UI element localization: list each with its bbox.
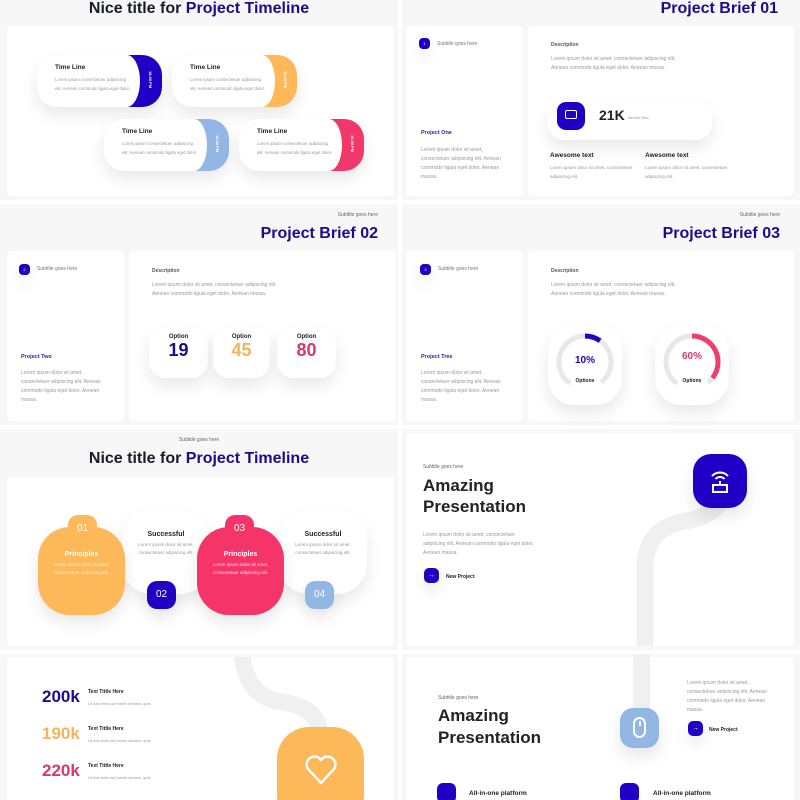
card: time line 3: Time Line bbox=[122, 128, 152, 135]
white card 4: Lorem ipsum dolor sit amet, bbox=[295, 542, 351, 547]
panel: left: consectetuer adipiscing elit. Aenean bbox=[21, 379, 101, 385]
card: time line 2: 18.00 PM bbox=[283, 71, 288, 88]
stat 220k: 220k bbox=[42, 761, 80, 780]
slide 5: timeline blobs: Subtitle goes here bbox=[179, 437, 219, 443]
stat pill 21K: 21K bbox=[599, 107, 625, 123]
card: time line 3: elit. Aenean commodo ligula eget dolor. bbox=[122, 150, 197, 155]
panel: right: Aenean commodo ligula eget dolor. Aenean massa. bbox=[551, 65, 665, 71]
card: time line 4: Time Line bbox=[257, 128, 287, 135]
card: time line 3 bbox=[104, 119, 229, 171]
badge 01 bbox=[68, 515, 97, 542]
heading bbox=[423, 476, 526, 516]
stat pill 21K bbox=[548, 100, 712, 140]
card: time line 2 bbox=[172, 55, 297, 107]
card: time line 1: elit. Aenean commodo ligula eget dolor. bbox=[55, 86, 130, 91]
panel: Text Tittle Here bbox=[88, 763, 124, 769]
panel: left: massa. bbox=[421, 174, 437, 180]
badge 03 bbox=[225, 515, 254, 542]
ring card 60%: Options bbox=[683, 378, 701, 384]
heading: Amazing bbox=[438, 706, 509, 725]
card: time line 4: elit. Aenean commodo ligula eget dolor. bbox=[257, 150, 332, 155]
badge 1 bbox=[419, 38, 430, 49]
panel: commodo ligula eget dolor. Aenean bbox=[687, 698, 765, 704]
ring card 60%: 60% bbox=[682, 351, 702, 362]
panel: options bbox=[129, 251, 396, 421]
panel: left bbox=[7, 251, 124, 421]
icon: chat bbox=[557, 102, 585, 130]
heading bbox=[438, 706, 541, 747]
card: time line 1: Lorem ipsum consectetuer adipiscing bbox=[55, 77, 126, 82]
panel: New Project bbox=[709, 727, 738, 733]
panel: left: consectetuer adipiscing elit. Aenean bbox=[421, 156, 501, 162]
pink card 3 bbox=[197, 527, 284, 615]
slide 2: project brief 01 bbox=[402, 0, 800, 200]
slide 5: timeline blobs bbox=[0, 429, 398, 650]
option 45: 45 bbox=[231, 340, 252, 360]
panel: Ut wisi enim ad minim veniam, quis bbox=[88, 775, 150, 780]
title: Nice title for Project Timeline bbox=[89, 0, 309, 17]
button new project: → bbox=[692, 725, 699, 732]
panel: left: Lorem ipsum dolor sit amet, bbox=[421, 370, 483, 376]
card: time line 3: 10.00 PM bbox=[215, 135, 220, 152]
option 19: Option bbox=[169, 334, 188, 340]
panel: rings: Lorem ipsum dolor sit amet, consectetuer adipiscing elit. bbox=[551, 282, 676, 288]
card: time line 4: Lorem ipsum consectetuer adipiscing bbox=[257, 141, 328, 146]
path bbox=[636, 506, 727, 646]
card: time line 2: Time Line bbox=[190, 64, 220, 71]
pink card 3: consectetuer adipiscing elit. bbox=[213, 570, 268, 575]
panel: left: massa. bbox=[421, 397, 437, 403]
panel: right: Lorem ipsum dolor sit amet, consectetuer adipiscing elit. bbox=[551, 56, 676, 62]
heading: Amazing bbox=[423, 476, 494, 495]
title: Project Brief 02 bbox=[261, 225, 378, 242]
panel: left: massa. bbox=[21, 397, 37, 403]
slide 3: project brief 02: Subtitle goes here bbox=[338, 212, 378, 218]
title: Project Brief 03 bbox=[663, 225, 780, 242]
panel: timeline bbox=[7, 26, 394, 196]
title: Nice title for Project Timeline bbox=[89, 450, 309, 467]
icon: router bbox=[693, 454, 747, 508]
orange card 1: consectetuer adipiscing elit. bbox=[54, 570, 109, 575]
option 80 bbox=[277, 327, 336, 378]
panel: right: Description bbox=[551, 42, 579, 48]
heading: Presentation bbox=[438, 728, 541, 747]
orange card 1: Lorem ipsum dolor sit amet, bbox=[54, 562, 109, 567]
title: Project Brief 01 bbox=[661, 0, 778, 17]
panel: left: Lorem ipsum dolor sit amet, bbox=[21, 370, 83, 376]
panel: left: Project Two bbox=[21, 354, 52, 360]
card: time line 2: elit. Aenean commodo ligula eget dolor. bbox=[190, 86, 265, 91]
panel: left bbox=[406, 251, 523, 421]
panel bbox=[406, 657, 794, 800]
badge 1: 1 bbox=[423, 41, 426, 46]
slide 8: amazing presentation 2 bbox=[402, 654, 800, 800]
white card 2: Successful bbox=[148, 531, 184, 538]
panel: right: Awesome text bbox=[645, 152, 689, 159]
white card 2: consectetuer adipiscing elit. bbox=[138, 550, 194, 555]
panel: Lorem ipsum dolor sit amet, bbox=[687, 680, 749, 686]
feature 2 bbox=[620, 783, 639, 800]
card: time line 1: Time Line bbox=[55, 64, 85, 71]
slide 7: stats and heart bbox=[0, 654, 398, 800]
card: time line 4: 10.00 PM bbox=[350, 135, 355, 152]
option 19: 19 bbox=[168, 340, 189, 360]
card: time line 1: 18.00 PM bbox=[148, 71, 153, 88]
panel bbox=[7, 657, 394, 800]
pink card 3: Principles bbox=[224, 551, 257, 558]
panel: right: adipiscing elit. bbox=[550, 174, 578, 179]
panel: left: Subtitle goes here bbox=[37, 266, 77, 272]
panel: left: Lorem ipsum dolor sit amet, bbox=[421, 147, 483, 153]
feature 1 bbox=[437, 783, 456, 800]
card: time line 3: Lorem ipsum consectetuer adipiscing bbox=[122, 141, 193, 146]
panel: Text Tittle Here bbox=[88, 726, 124, 732]
badge 02: 02 bbox=[156, 589, 167, 600]
panel: Ut wisi enim ad minim veniam, quis bbox=[88, 738, 150, 743]
stat pill 21K: Member New bbox=[628, 116, 649, 120]
panel: Text Tittle Here bbox=[88, 689, 124, 695]
panel bbox=[406, 433, 794, 646]
slide 6: amazing presentation bbox=[402, 429, 800, 650]
panel: right bbox=[528, 26, 794, 196]
button new project bbox=[424, 568, 439, 583]
white card 2 bbox=[122, 510, 210, 594]
panel: Lorem ipsum dolor sit amet, consectetuer bbox=[423, 532, 515, 538]
card: time line 2: Lorem ipsum consectetuer adipiscing bbox=[190, 77, 261, 82]
orange card 1: Principles bbox=[65, 551, 98, 558]
button new project: → bbox=[428, 572, 435, 579]
panel: adipiscing elit. Aenean commodo ligula eget dolor. bbox=[423, 541, 534, 547]
slide 4: project brief 03: Subtitle goes here bbox=[740, 212, 780, 218]
icon: heart blob bbox=[277, 727, 364, 800]
panel: All-in-one platform bbox=[653, 790, 711, 797]
pink card 3: Lorem ipsum dolor sit amet, bbox=[213, 562, 268, 567]
ring card 10%: 10% bbox=[575, 355, 595, 366]
icon: mouse bbox=[620, 708, 659, 748]
panel: right: Lorem ipsum dolor sit amet, consectetuer bbox=[645, 165, 728, 170]
panel: All-in-one platform bbox=[469, 790, 527, 797]
stat 200k: 200k bbox=[42, 687, 80, 706]
badge 04 bbox=[305, 581, 334, 609]
panel: consectetuer adipiscing elit. Aenean bbox=[687, 689, 767, 695]
panel: Aenean massa. bbox=[423, 550, 458, 556]
white card 2: Lorem ipsum dolor sit amet, bbox=[138, 542, 194, 547]
panel: left: Subtitle goes here bbox=[437, 41, 477, 47]
panel: rings: Aenean commodo ligula eget dolor. Aenean massa. bbox=[551, 291, 665, 297]
path bbox=[234, 657, 328, 727]
option 19 bbox=[149, 327, 208, 378]
option 80: Option bbox=[297, 334, 316, 340]
panel: left: consectetuer adipiscing elit. Aenean bbox=[421, 379, 501, 385]
stat 190k: 190k bbox=[42, 724, 80, 743]
option 45 bbox=[213, 327, 270, 378]
badge 01: 01 bbox=[77, 523, 88, 534]
panel: left: Project One bbox=[421, 130, 452, 136]
panel: options: Description bbox=[152, 268, 180, 274]
card: time line 4 bbox=[239, 119, 364, 171]
panel: left: Project Tree bbox=[421, 354, 452, 360]
panel: New Project bbox=[446, 574, 475, 580]
panel: Subtitle goes here bbox=[423, 464, 463, 470]
panel: left: commodo ligula eget dolor. Aenean bbox=[421, 165, 499, 171]
panel: massa. bbox=[687, 707, 703, 713]
option 80: 80 bbox=[296, 340, 317, 360]
panel: options: Aenean commodo ligula eget dolor. Aenean massa. bbox=[152, 291, 266, 297]
panel: left bbox=[406, 26, 523, 196]
orange card 1 bbox=[38, 527, 125, 615]
panel: Subtitle goes here bbox=[438, 695, 478, 701]
panel bbox=[7, 477, 394, 646]
panel: left: commodo ligula eget dolor. Aenean bbox=[421, 388, 499, 394]
ring card 10%: Options bbox=[576, 378, 594, 384]
panel: rings: Description bbox=[551, 268, 579, 274]
path bbox=[633, 652, 650, 722]
badge 03: 03 bbox=[234, 523, 245, 534]
panel: left: commodo ligula eget dolor. Aenean bbox=[21, 388, 99, 394]
white card 4 bbox=[279, 510, 367, 594]
heading: Presentation bbox=[423, 497, 526, 516]
slide 4: project brief 03 bbox=[402, 204, 800, 425]
panel: options: Lorem ipsum dolor sit amet, consectetuer adipiscing elit. bbox=[152, 282, 277, 288]
panel: Ut wisi enim ad minim veniam, quis bbox=[88, 701, 150, 706]
panel: left: 2 bbox=[23, 267, 26, 272]
slide 3: project brief 02 bbox=[0, 204, 398, 425]
badge 04: 04 bbox=[314, 589, 325, 600]
panel: rings bbox=[528, 251, 794, 421]
white card 4: consectetuer adipiscing elit. bbox=[295, 550, 351, 555]
panel: right: Lorem ipsum dolor sit amet, consectetuer bbox=[550, 165, 633, 170]
panel: right: Awesome text bbox=[550, 152, 594, 159]
button new project bbox=[688, 721, 703, 736]
panel: right: adipiscing elit. bbox=[645, 174, 673, 179]
badge 02 bbox=[147, 581, 176, 609]
slide 1: timeline cards bbox=[0, 0, 398, 200]
panel: left: 2 bbox=[424, 267, 427, 272]
panel: left: Subtitle goes here bbox=[438, 266, 478, 272]
white card 4: Successful bbox=[305, 531, 341, 538]
card: time line 1 bbox=[37, 55, 162, 107]
ring card 60% bbox=[655, 325, 729, 405]
option 45: Option bbox=[232, 334, 251, 340]
ring card 10% bbox=[548, 325, 622, 405]
